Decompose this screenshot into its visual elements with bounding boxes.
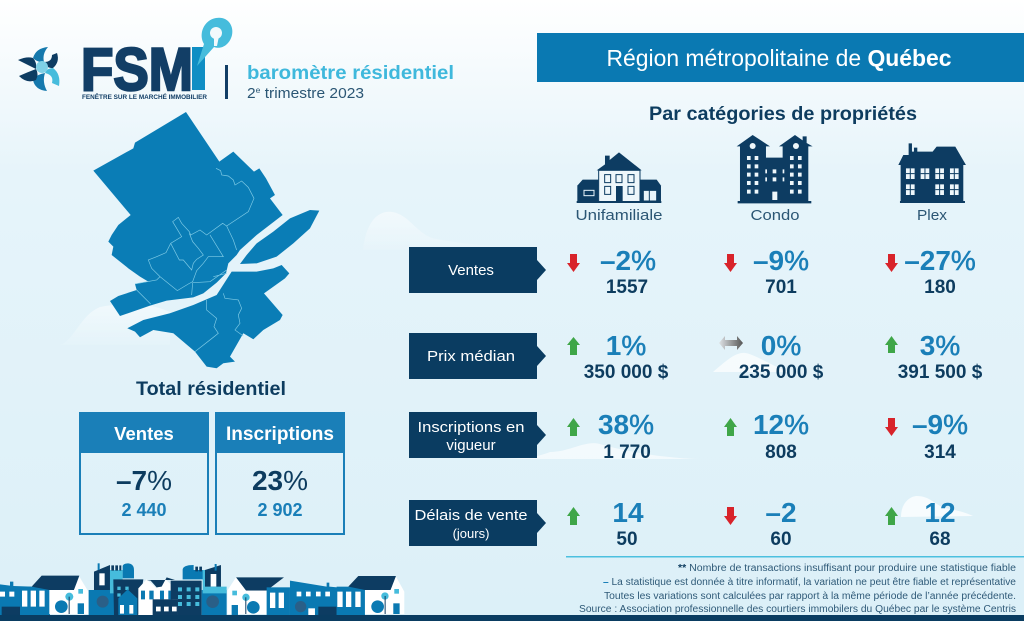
label: Unifamiliale: Unifamiliale [576, 207, 662, 224]
row label: Prix médian: Prix médian [427, 348, 515, 365]
row: ventes values: 1557 [606, 277, 648, 298]
heading: categories: Par catégories de propriétés [649, 103, 917, 125]
row: delais values: 68 [929, 529, 951, 550]
row: prix median values: 350 000 $ [584, 362, 669, 383]
illustration: village skyline [0, 563, 420, 621]
row: prix median values: 3% [920, 330, 960, 361]
row: inscriptions values: 38% [598, 409, 654, 440]
row: delais values: 50 [616, 529, 638, 550]
icon: arrow up [885, 336, 898, 353]
logo letter I [192, 47, 205, 90]
label: Plex: Plex [917, 207, 948, 224]
row label: Inscriptions en vigueur: Inscriptions en [418, 419, 524, 436]
row: inscriptions values: 12% [753, 409, 809, 440]
panel: total ventes: –7% [116, 465, 172, 496]
heading: baromètre résidentiel: baromètre résidentiel [247, 62, 454, 84]
icon: arrow up [885, 507, 898, 525]
bottom band [0, 615, 1024, 621]
row: prix median values: 235 000 $ [739, 362, 824, 383]
icon: neutral arrow [719, 336, 743, 350]
row: prix median values: 0% [761, 330, 801, 361]
panel: total inscriptions: 2 902 [257, 500, 303, 520]
icon: arrow down [724, 254, 737, 272]
panel: total inscriptions: Inscriptions [226, 424, 334, 445]
icon: arrow down [885, 254, 898, 272]
row: delais values: –2 [765, 497, 797, 528]
row: inscriptions values: 314 [924, 442, 956, 463]
logo wordmark: FSM [81, 36, 193, 103]
footnotes: ** Nombre de transactions insuffisant pour produire une statistique fiable [678, 563, 1016, 574]
row: delais values: 12 [924, 497, 956, 528]
heading: Total résidentiel: Total résidentiel [136, 378, 286, 400]
footnotes [579, 563, 1016, 615]
label: Condo: Condo [750, 207, 800, 224]
subheading: trimestre: 2 [247, 86, 255, 102]
map: Quebec region [93, 112, 319, 368]
icon: speech bubble [197, 18, 232, 66]
subheading: trimestre: trimestre 2023 [260, 86, 364, 102]
row: prix median values [567, 330, 983, 383]
row: inscriptions values [567, 409, 968, 463]
panel: total inscriptions [216, 413, 344, 534]
row label: Prix médian [409, 333, 546, 379]
row: inscriptions values: 808 [765, 442, 797, 463]
icon: arrow up [567, 507, 580, 525]
footnotes: Source : Association professionnelle des courtiers immobilers du Québec par le système Centris [579, 604, 1016, 615]
panel: total ventes [80, 413, 208, 534]
row label: Inscriptions en vigueur: vigueur [446, 437, 496, 454]
footnotes: Toutes les variations sont calculées par rapport à la même période de l’année précédente. [604, 591, 1016, 602]
row label: Délais de vente: (jours) [453, 526, 489, 541]
icon: arrow down [885, 418, 898, 436]
row: inscriptions values: –9% [912, 409, 968, 440]
row: delais values: 14 [612, 497, 644, 528]
logo: FSMI [18, 18, 232, 103]
row: ventes values: –27% [904, 245, 976, 276]
title banner: region: Région métropolitaine de Québec [606, 45, 952, 71]
logo tagline: FENÊTRE SUR LE MARCHÉ IMMOBILIER [82, 93, 208, 101]
icon: arrow down [724, 507, 737, 525]
row label: Inscriptions en vigueur [409, 412, 546, 458]
icon: plex building [898, 143, 966, 203]
subheading: trimestre: e [256, 86, 261, 95]
row: ventes values: 180 [924, 277, 956, 298]
row label: Ventes: Ventes [448, 262, 494, 279]
icon: arrow down [567, 254, 580, 272]
footnotes: – La statistique est donnée à titre informatif, la variation ne peut être fiable et représentative [603, 577, 1016, 588]
icon: logo pinwheel [18, 47, 59, 91]
row: prix median values: 391 500 $ [898, 362, 983, 383]
row label: Délais de vente: Délais de vente [414, 507, 528, 524]
icon: single family house [577, 152, 661, 203]
row label: Délais de vente [409, 500, 546, 546]
icon: arrow up [724, 418, 737, 436]
panel: total ventes: Ventes [114, 423, 174, 444]
row: ventes values [567, 245, 976, 298]
row: prix median values: 1% [606, 330, 646, 361]
row label: Ventes [409, 247, 546, 293]
icon: arrow up [567, 418, 580, 436]
row: ventes values: 701 [765, 277, 797, 298]
row: delais values [567, 497, 956, 550]
row: ventes values: –2% [600, 245, 656, 276]
panel: total ventes: 2 440 [121, 500, 167, 520]
icon: condo building [737, 135, 813, 203]
title banner: region [537, 33, 1024, 82]
row: delais values: 60 [770, 529, 792, 550]
panel: total inscriptions: 23% [252, 465, 308, 496]
row: ventes values: –9% [753, 245, 809, 276]
row: inscriptions values: 1 770 [603, 442, 651, 463]
icon: arrow up [567, 337, 580, 355]
